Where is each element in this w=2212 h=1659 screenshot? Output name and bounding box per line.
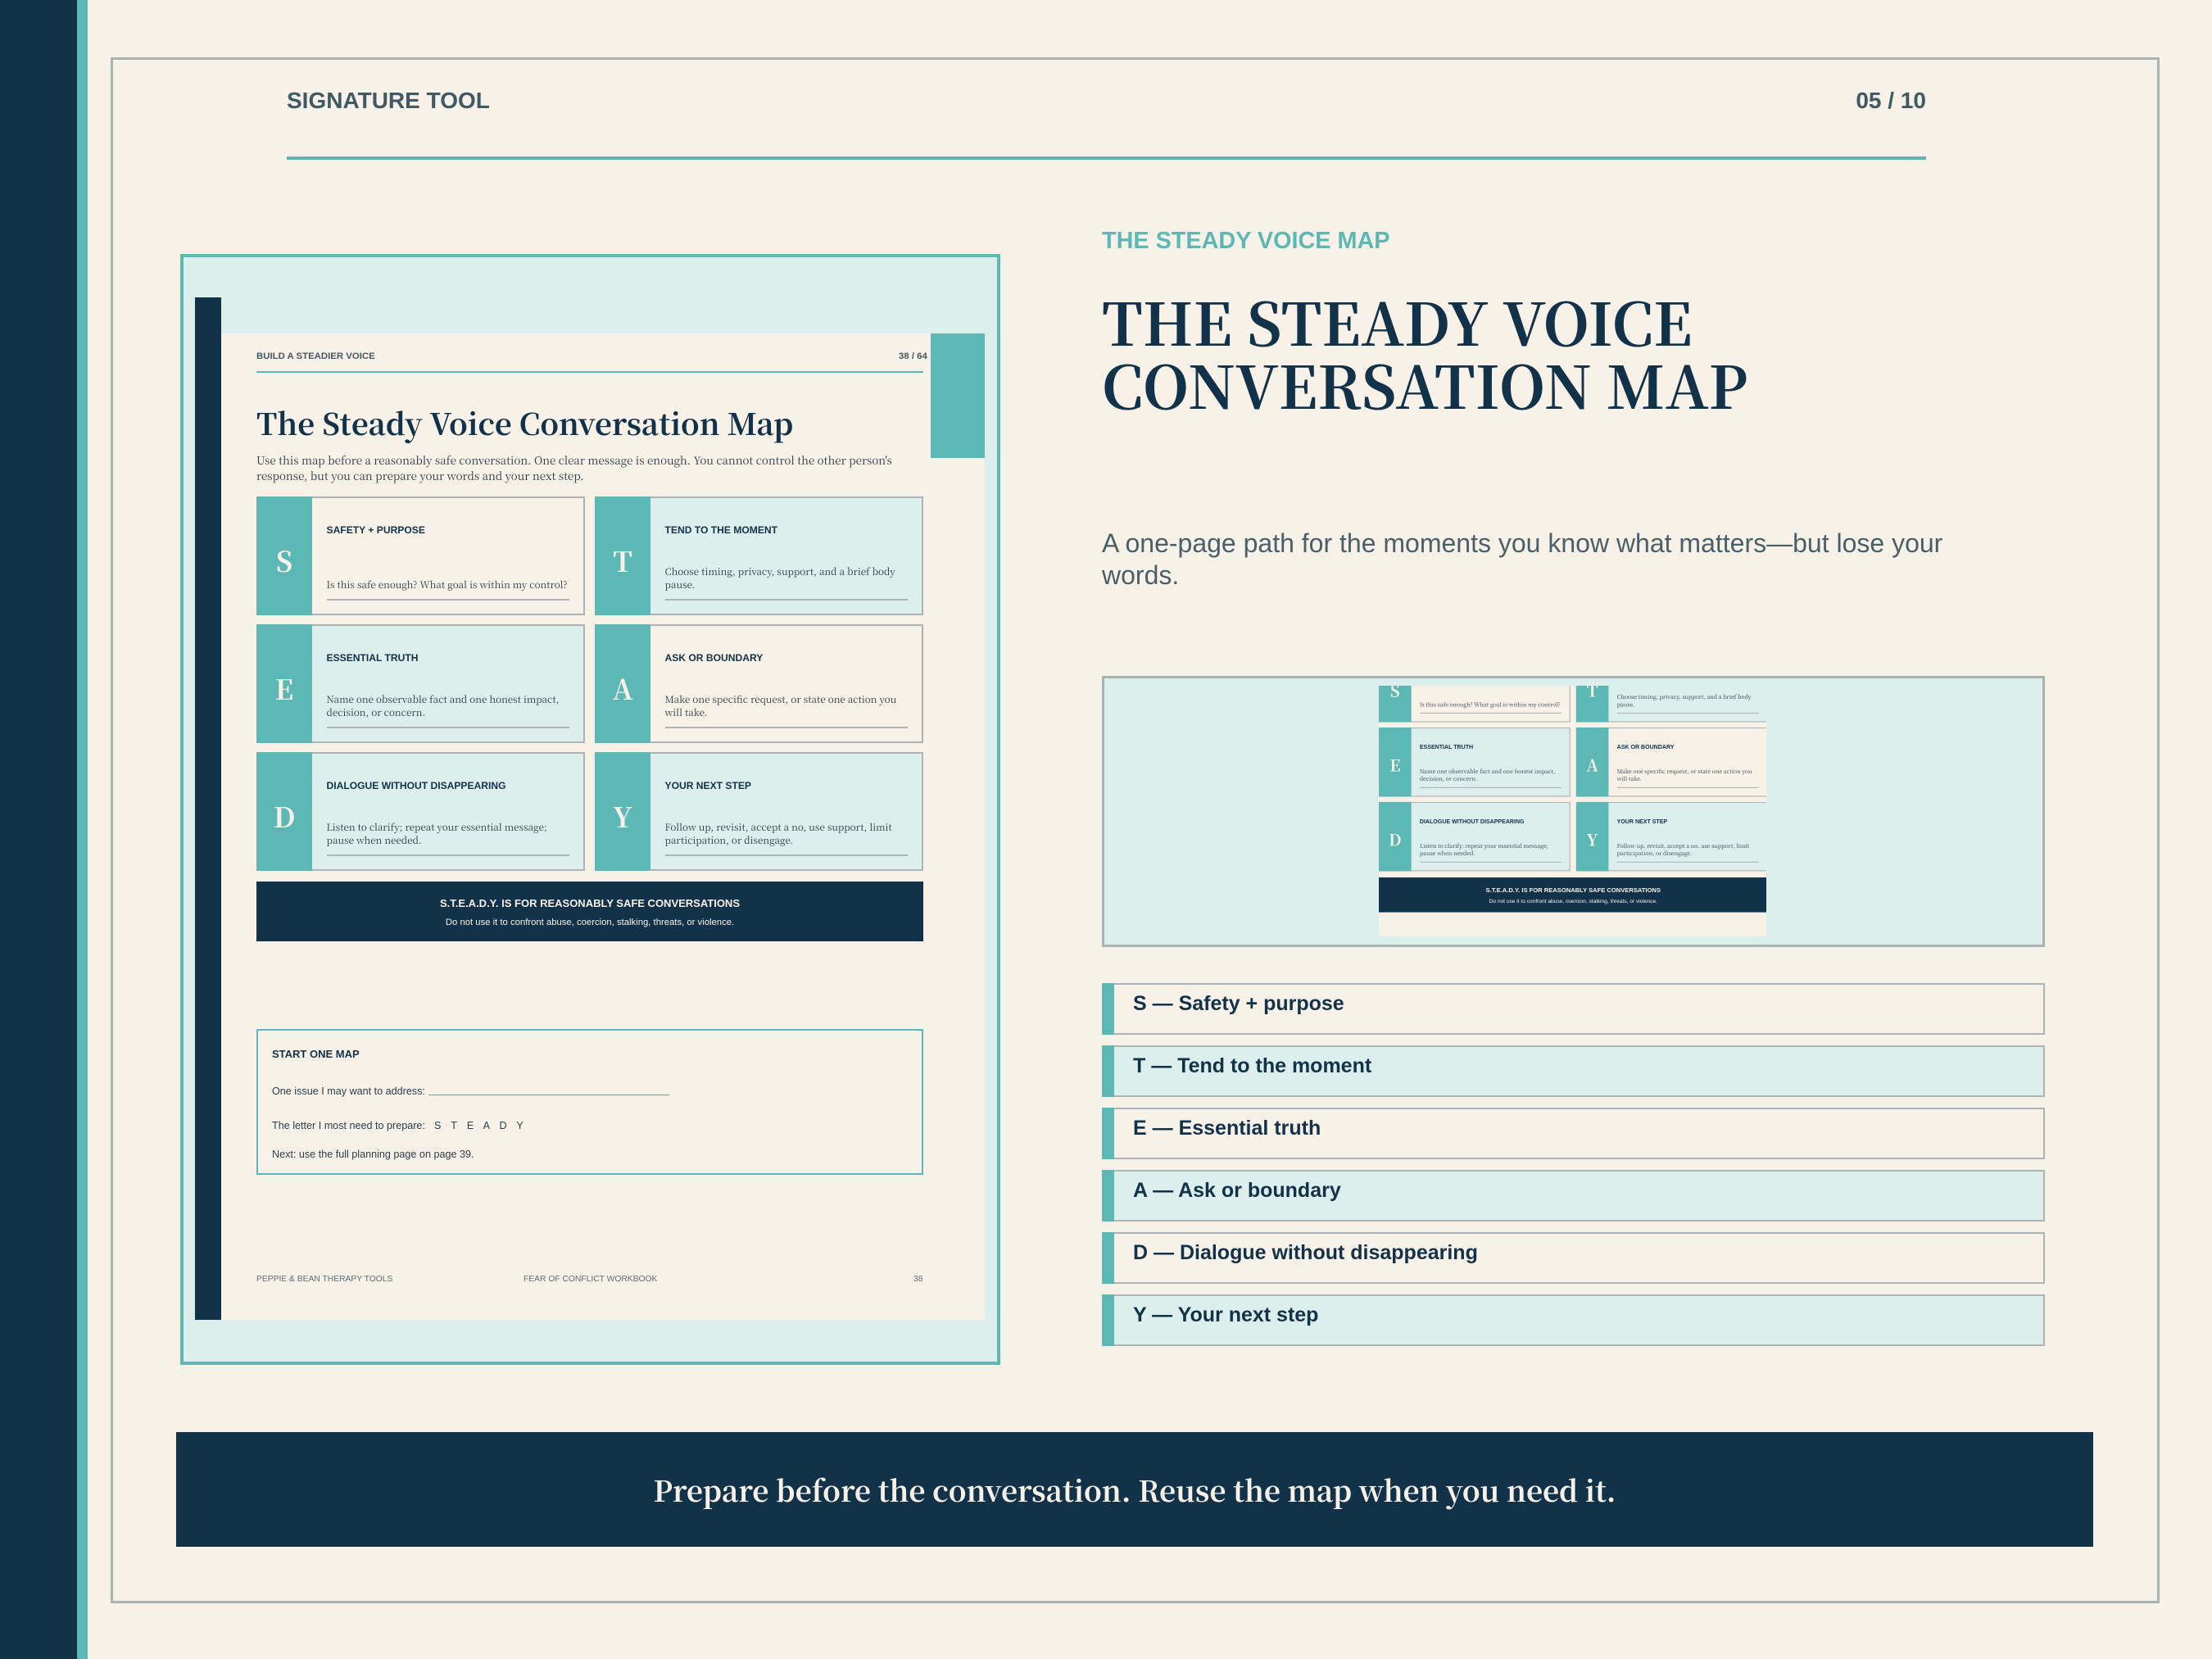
legend row Y: [1102, 1294, 2045, 1346]
scaled copy of the map: [1379, 686, 1766, 913]
mini card D: D: [1389, 827, 1402, 850]
main title: [1102, 279, 1748, 426]
card Y: Follow up, revisit, accept a no, use support, limit: [665, 821, 892, 834]
mini card T: Choose timing, privacy, support, and a brief body: [1617, 693, 1752, 700]
legend row S: S — Safety + purpose: [1133, 991, 1344, 1014]
start one map heading: START ONE MAP: [272, 1048, 360, 1060]
page intro text: Use this map before a reasonably safe conversation. One clear message is enough. You cannot control the other person's: [256, 452, 892, 468]
mini card A: A: [1586, 753, 1598, 776]
legend row A: A — Ask or boundary: [1133, 1178, 1341, 1201]
mini card S: Is this safe enough? What goal is within my control?: [1420, 700, 1560, 709]
mini card T: [1576, 653, 1768, 723]
mini safety banner: [1379, 877, 1768, 913]
header rule: [287, 156, 1926, 160]
card Y: participation, or disengage.: [665, 834, 793, 847]
steady letters: S T E A D Y: [434, 1120, 524, 1131]
closing message: Prepare before the conversation. Reuse the map when you need it.: [654, 1470, 1616, 1511]
card Y: Y: [613, 796, 632, 836]
page sheet: [221, 333, 985, 1320]
mini card D: Listen to clarify; repeat your essential message;: [1420, 842, 1548, 850]
main title: THE STEADY VOICE: [1102, 279, 1693, 363]
mini card Y: Follow up, revisit, accept a no, use support, limit: [1617, 842, 1749, 850]
S.T.E.A.D.Y. card grid: [256, 496, 923, 871]
page header rule: [256, 371, 923, 373]
mini banner heading: S.T.E.A.D.Y. IS FOR REASONABLY SAFE CONVERSATIONS: [1486, 886, 1661, 894]
mini card A: Make one specific request, or state one action you: [1617, 768, 1752, 775]
prompt: letter: The letter I most need to prepare:: [272, 1120, 425, 1131]
safety banner note: Do not use it to confront abuse, coercion, stalking, threats, or violence.: [446, 918, 734, 927]
mini card Y: [1576, 802, 1768, 871]
mini card D: DIALOGUE WITHOUT DISAPPEARING: [1420, 818, 1525, 825]
legend row E: [1102, 1108, 2045, 1159]
card S: S: [276, 540, 292, 580]
card Y: YOUR NEXT STEP: [665, 780, 751, 791]
mini card A: will take.: [1617, 775, 1642, 783]
preview crop: [1379, 686, 1766, 936]
card E: Name one observable fact and one honest impact,: [326, 693, 559, 706]
card D: [256, 752, 585, 871]
card D: DIALOGUE WITHOUT DISAPPEARING: [326, 780, 506, 791]
panel: workbook page preview: [180, 254, 1000, 1365]
card D: D: [274, 796, 295, 836]
header label: signature tool: SIGNATURE TOOL: [287, 88, 490, 113]
card T: T: [613, 540, 632, 580]
legend row E: E — Essential truth: [1133, 1116, 1321, 1139]
mini card D: [1379, 802, 1571, 871]
preview panel: zoomed map crop: [1102, 676, 2045, 947]
mini card A: [1576, 728, 1768, 796]
legend row S: [1102, 983, 2045, 1035]
card A: Make one specific request, or state one action you: [665, 693, 896, 706]
subtitle: words.: [1102, 560, 1179, 590]
card E: decision, or concern.: [326, 706, 425, 719]
card S: SAFETY + PURPOSE: [326, 524, 425, 536]
legend row D: D — Dialogue without disappearing: [1133, 1240, 1478, 1263]
mini card Y: participation, or disengage.: [1617, 850, 1692, 858]
safety banner heading: S.T.E.A.D.Y. IS FOR REASONABLY SAFE CONVERSATIONS: [440, 897, 740, 909]
page intro text: response, but you can prepare your words and your next step.: [256, 468, 584, 483]
card T: pause.: [665, 578, 696, 592]
left navy sidebar: [0, 0, 77, 1659]
mini card Y: YOUR NEXT STEP: [1617, 818, 1667, 825]
page running header: BUILD A STEADIER VOICE: [256, 351, 375, 361]
legend row T: T — Tend to the moment: [1133, 1054, 1371, 1077]
page footer number: 38: [913, 1275, 922, 1284]
legend row D: [1102, 1232, 2045, 1284]
page teal corner tab: [931, 333, 985, 458]
mini card D: pause when needed.: [1420, 850, 1475, 858]
mini card T: pause.: [1617, 700, 1634, 709]
main title: CONVERSATION MAP: [1102, 342, 1748, 426]
card D: Listen to clarify; repeat your essential message;: [326, 821, 547, 834]
page footer left: PEPPIE & BEAN THERAPY TOOLS: [256, 1275, 392, 1284]
subtitle: A one-page path for the moments you know what matters—but lose your: [1102, 528, 1942, 558]
page spine: [195, 297, 221, 1320]
page footer centre: FEAR OF CONFLICT WORKBOOK: [524, 1275, 657, 1284]
card E: ESSENTIAL TRUTH: [326, 652, 418, 664]
mini card Y: Y: [1587, 827, 1598, 850]
prompt: issue: One issue I may want to address:: [272, 1085, 425, 1096]
mini card A: ASK OR BOUNDARY: [1617, 744, 1674, 750]
subtitle: [1102, 528, 1942, 590]
teal sidebar accent: [77, 0, 88, 1659]
card T: [595, 496, 923, 615]
card A: A: [612, 668, 633, 708]
mini card E: [1379, 728, 1571, 796]
card A: will take.: [665, 706, 708, 719]
safety banner: [256, 882, 923, 941]
mini card E: ESSENTIAL TRUTH: [1420, 744, 1473, 750]
mini card E: Name one observable fact and one honest impact,: [1420, 768, 1555, 775]
mini banner note: Do not use it to confront abuse, coercion, stalking, threats, or violence.: [1489, 899, 1657, 904]
mini card E: decision, or concern.: [1420, 775, 1477, 783]
card E: [256, 624, 585, 743]
card T: Choose timing, privacy, support, and a brief body: [665, 565, 895, 578]
page title: The Steady Voice Conversation Map: [256, 401, 793, 444]
mini card E: E: [1389, 753, 1400, 776]
closing banner: [176, 1432, 2093, 1547]
legend row A: [1102, 1170, 2045, 1222]
card Y: [595, 752, 923, 871]
legend row T: [1102, 1045, 2045, 1097]
card A: [595, 624, 923, 743]
eyebrow: THE STEADY VOICE MAP: [1102, 228, 1389, 254]
panel: start one map: [256, 1029, 923, 1175]
card S: [256, 496, 585, 615]
card S: Is this safe enough? What goal is within my control?: [326, 578, 568, 592]
card T: TEND TO THE MOMENT: [665, 524, 777, 536]
next step text: Next: use the full planning page on page 39.: [272, 1149, 474, 1160]
mini card S: [1379, 653, 1571, 723]
card D: pause when needed.: [326, 834, 422, 847]
page number: 38 / 64: [899, 351, 927, 361]
page intro text: [256, 452, 892, 483]
legend row Y: Y — Your next step: [1133, 1303, 1318, 1326]
page counter: 05 / 10: [1856, 88, 1926, 113]
card A: ASK OR BOUNDARY: [665, 652, 763, 664]
card E: E: [275, 668, 293, 708]
